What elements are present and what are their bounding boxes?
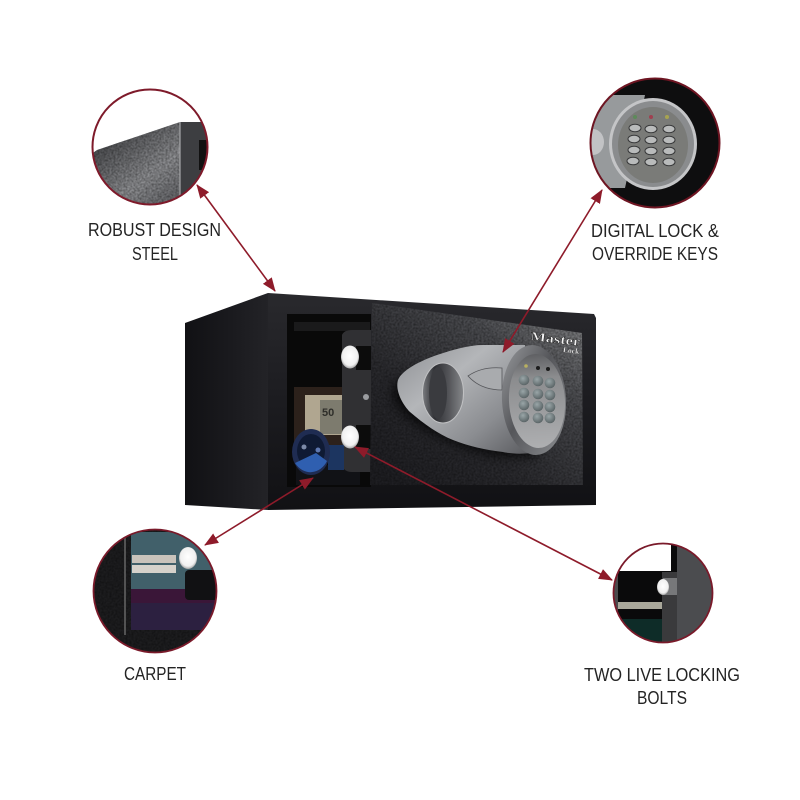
detail circle: keypad [590,78,720,208]
detail circle: bolt [612,542,714,644]
label [88,220,221,264]
brand logo: Lock [563,345,581,356]
digital keypad [499,343,569,457]
callout: digital lock [590,78,720,260]
label: STEEL [132,244,178,264]
callout: carpet [90,525,221,684]
arrow: carpet [205,478,313,545]
leaf indent [468,368,502,390]
safe side panel [185,293,268,510]
label: TWO LIVE LOCKING [584,665,740,685]
label: BOLTS [637,688,687,708]
safe illustration [185,293,596,510]
detail circle: carpet [90,525,221,655]
label: ROBUST DESIGN [88,220,221,240]
label: OVERRIDE KEYS [592,244,718,264]
lower locking bolt [341,426,359,448]
brand logo: Master [530,329,582,349]
infographic canvas [89,78,739,704]
label: CARPET [124,664,186,684]
safe door [370,303,583,485]
safe front body [268,293,596,510]
bolt housing [342,330,371,472]
callout: two live locking bolts [584,540,740,708]
label [584,665,740,708]
arrow: locking bolts [355,447,612,580]
turn dial [422,363,464,423]
callout: robust design steel [88,85,221,264]
upper locking bolt [341,346,359,368]
label [591,221,719,264]
handle plate [397,345,530,454]
plate shadow [393,352,540,457]
watch [292,429,344,475]
safe interior opening [287,314,371,487]
banknotes [305,395,343,435]
brand logo [529,329,582,356]
label: DIGITAL LOCK & [591,221,719,241]
detail circle: steel corner [90,85,210,210]
arrow: steel corner [197,185,275,291]
banknotes: 50 [322,407,334,419]
arrow: digital lock [503,190,602,352]
